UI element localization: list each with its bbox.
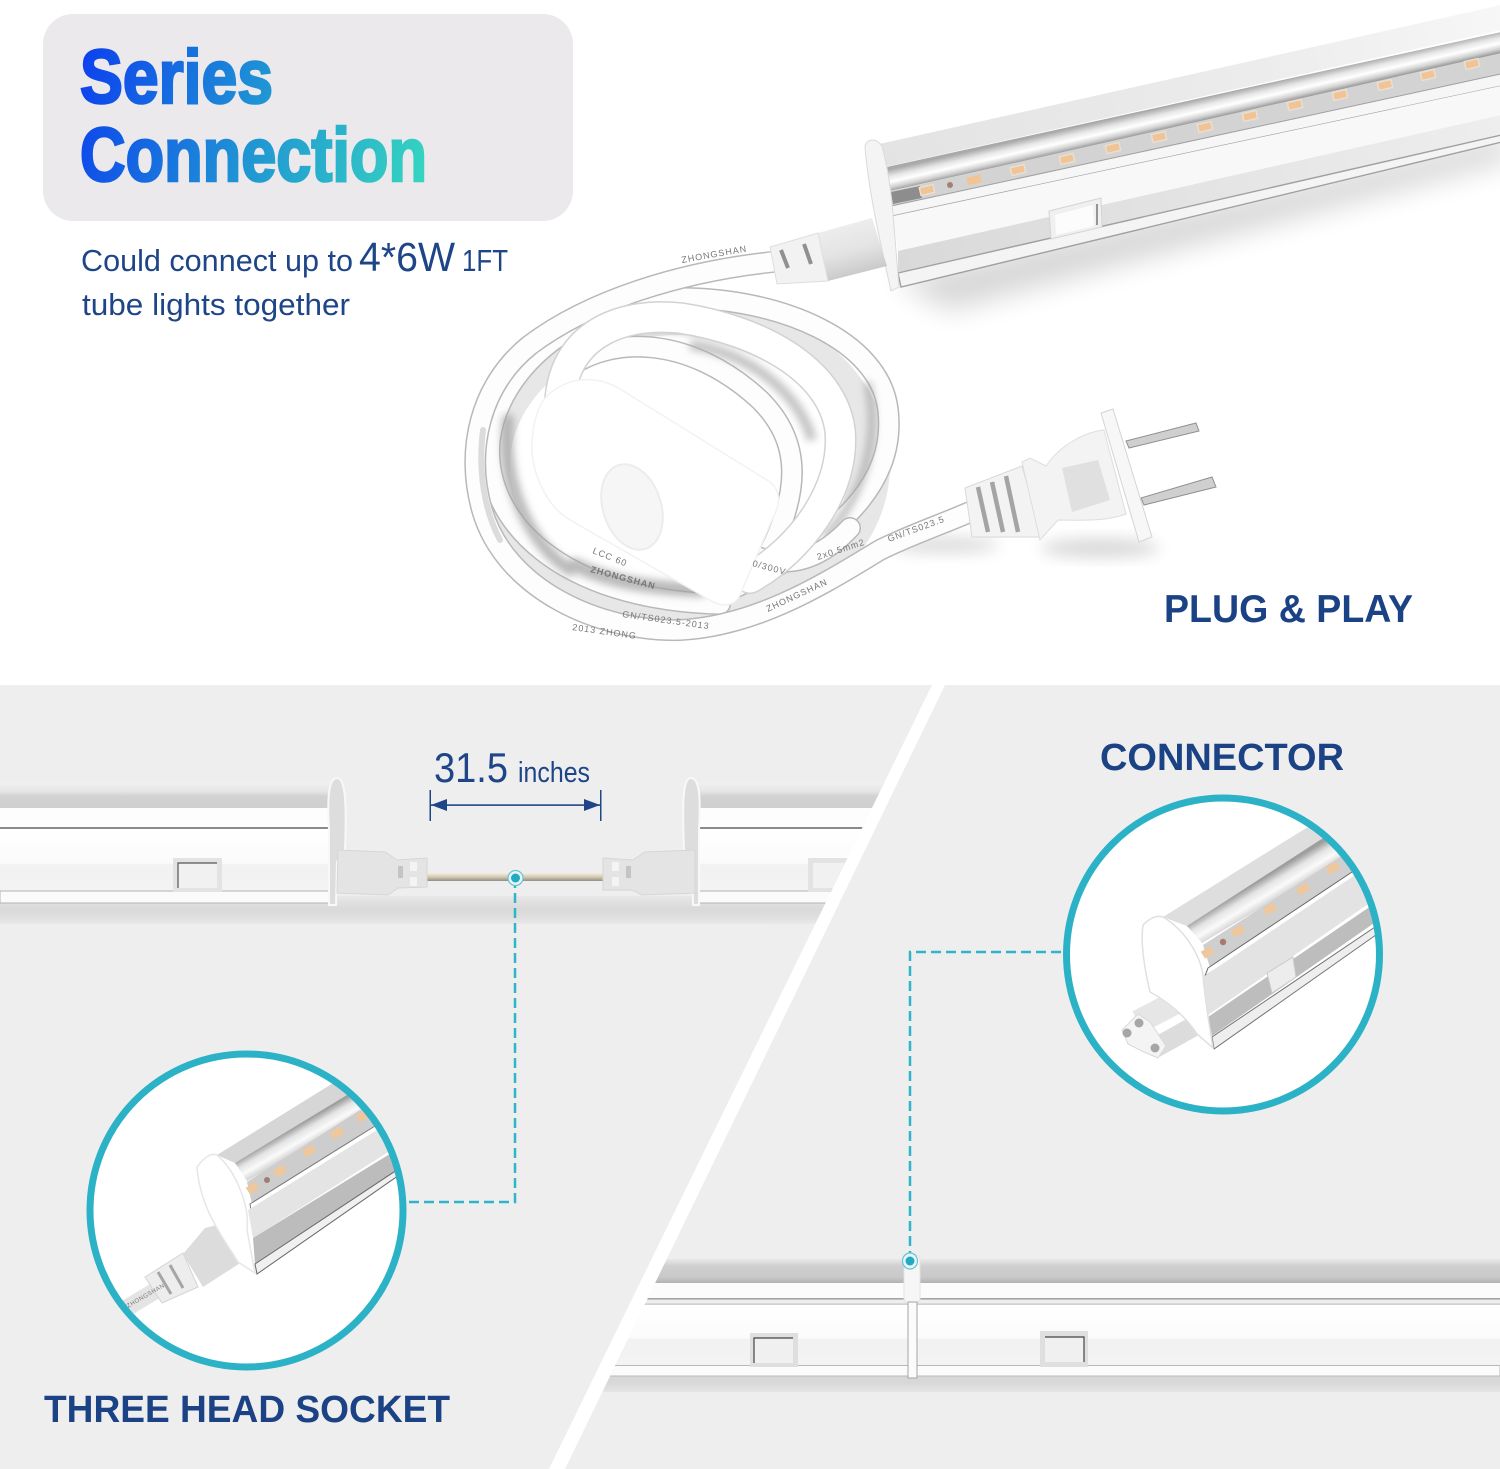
upper body bbox=[1203, 850, 1400, 1015]
ribbed relief bbox=[145, 1253, 198, 1303]
inline switch body bbox=[532, 380, 778, 605]
right plug connector bbox=[603, 850, 695, 895]
left plug connector bbox=[337, 850, 427, 895]
cord loop: front bbox=[560, 317, 841, 578]
text block: connection capacity: 1FT bbox=[462, 243, 508, 278]
left tube bottom strip bbox=[0, 891, 332, 903]
cord print: ZHONGSHAN bbox=[126, 1283, 166, 1310]
right tube bbox=[683, 778, 905, 905]
tube body bbox=[600, 1305, 1500, 1365]
strain relief bbox=[770, 233, 828, 284]
cord gap shadows bbox=[507, 327, 872, 590]
left tube body bbox=[0, 829, 328, 864]
label: THREE HEAD SOCKET: THREE HEAD SOCKET bbox=[44, 1389, 450, 1431]
inset circle fill bbox=[1067, 798, 1379, 1110]
resistor dot and first chip bbox=[947, 175, 982, 188]
panel: series connection title card bbox=[43, 14, 573, 221]
inset tube contents bbox=[1122, 827, 1375, 1058]
bottom strip bbox=[1212, 910, 1400, 1049]
cord loop: outer leading to tube and plug bbox=[475, 262, 970, 630]
track end reflection bbox=[891, 186, 922, 204]
inset tube contents bbox=[123, 1084, 396, 1314]
dimension: 31.5 inches: inches bbox=[518, 757, 590, 789]
dimension: 31.5 inches: 31.5 bbox=[434, 744, 508, 791]
right tube body bbox=[700, 829, 862, 864]
switch right bbox=[1040, 1331, 1088, 1367]
tube top band bbox=[600, 1259, 1500, 1283]
three head plug: upper barrel bbox=[1138, 1000, 1180, 1022]
white rail bbox=[891, 72, 1500, 216]
rod bbox=[1187, 838, 1340, 943]
cord loop: inner bbox=[565, 347, 792, 570]
tube cover bbox=[1164, 827, 1322, 926]
cord strand beside switch bbox=[725, 528, 850, 562]
plug prongs bbox=[1126, 423, 1216, 505]
inset: three head socket detail bbox=[90, 1040, 415, 1367]
LED track bbox=[1203, 826, 1400, 968]
tube top cover bbox=[875, 3, 1500, 167]
LEDs bbox=[246, 1109, 370, 1195]
cable between tubes bbox=[427, 873, 603, 881]
plug ridged grip bbox=[1062, 460, 1110, 512]
left tube dark line bbox=[0, 827, 332, 829]
label: CONNECTOR: CONNECTOR bbox=[1100, 737, 1344, 779]
plug holes bbox=[1122, 1018, 1160, 1052]
rail lines bbox=[600, 1298, 1500, 1305]
cord printing: 2x0.5mm2 bbox=[816, 537, 866, 562]
left tube switch bbox=[173, 858, 222, 892]
bottom strip bbox=[898, 133, 1500, 287]
cord printing: 0/300V bbox=[751, 558, 787, 577]
plug flange bbox=[1101, 409, 1152, 542]
strain relief grooves bbox=[781, 244, 811, 268]
text block: connection capacity: tube lights together bbox=[82, 287, 350, 322]
illustration: LED tube light, top right bbox=[865, 3, 1500, 310]
shade under front loop bbox=[690, 345, 812, 440]
rocker switch bbox=[1267, 957, 1296, 993]
white rail bbox=[1205, 848, 1400, 976]
title: Series Connection bbox=[80, 35, 427, 198]
illustration: two tubes butted together bbox=[590, 1254, 1500, 1386]
gray band bbox=[253, 1154, 394, 1264]
end cap bbox=[197, 1154, 255, 1273]
end cap bbox=[1142, 916, 1213, 1048]
gray band bbox=[1208, 888, 1400, 1036]
callout line: cable to socket detail bbox=[407, 870, 523, 1202]
plug strain relief ribs bbox=[965, 466, 1042, 537]
cord printing: GN/TS023.5-2013 bbox=[622, 609, 710, 631]
cord bbox=[123, 1284, 158, 1314]
text block: connection capacity bbox=[81, 234, 508, 322]
right tube white rail bbox=[700, 808, 872, 827]
rocker switch bbox=[1049, 198, 1102, 239]
right tube switch bbox=[808, 858, 848, 892]
gray body band bbox=[898, 113, 1500, 273]
shadow under tubes bbox=[0, 903, 840, 917]
dimension arrow bbox=[430, 790, 602, 821]
text block: connection capacity: Could connect up to bbox=[81, 243, 353, 278]
tube end cap bbox=[865, 140, 899, 291]
left tube end cap bbox=[328, 778, 346, 905]
tube shadow bbox=[590, 1374, 1500, 1386]
title card background bbox=[43, 14, 573, 221]
inset ring bbox=[1066, 798, 1380, 1111]
illustration: two tubes joined by cable bbox=[0, 778, 905, 917]
connector sleeve bbox=[818, 218, 887, 281]
text block: connection capacity: 4*6W bbox=[359, 234, 455, 280]
marker dot bbox=[902, 1253, 918, 1269]
cord printing: LCC 60 bbox=[591, 546, 629, 569]
coil backing shade bbox=[490, 315, 870, 615]
three head plug: end face bbox=[1122, 1014, 1166, 1058]
LEDs bbox=[1201, 861, 1340, 959]
left tube bbox=[0, 778, 346, 905]
plug and cord floor shadows bbox=[890, 538, 1160, 557]
marker dot bbox=[508, 870, 523, 886]
right tube dark line bbox=[700, 827, 862, 829]
three head plug: lower barrel bbox=[1155, 1024, 1198, 1048]
title: Series Connection: Series bbox=[80, 35, 273, 120]
left tube cover bbox=[0, 791, 328, 808]
tube shadow bbox=[895, 135, 1500, 310]
panel: gray background, right bbox=[565, 685, 1500, 1469]
upper body bbox=[893, 84, 1500, 251]
white rail bbox=[250, 1126, 374, 1209]
label: PLUG & PLAY: PLUG & PLAY bbox=[1164, 588, 1413, 631]
cord printing: 2013 ZHONG bbox=[572, 622, 638, 641]
cord printing: ZHONGSHAN bbox=[681, 244, 748, 265]
cord printing: GN/TS023.5 bbox=[886, 514, 946, 544]
LED track bbox=[247, 1110, 374, 1202]
right tube end cap bbox=[683, 778, 700, 905]
right tube cover bbox=[700, 790, 880, 808]
plug body bbox=[1022, 430, 1126, 540]
tube white rail bbox=[600, 1283, 1500, 1299]
title: Series Connection: Connection bbox=[80, 113, 427, 198]
inset circle fill bbox=[90, 1054, 402, 1366]
inline switch rocker bbox=[591, 456, 673, 558]
connector sleeve bbox=[184, 1226, 239, 1287]
inset: connector detail bbox=[1066, 775, 1400, 1111]
silver rod bbox=[887, 30, 1500, 191]
left tube white rail bbox=[0, 808, 335, 828]
cord printing bbox=[572, 244, 946, 641]
bottom strip bbox=[254, 1171, 396, 1275]
illustration: tube connector on cord bbox=[770, 218, 887, 284]
illustration: power cord with inline switch and plug bbox=[475, 244, 1216, 641]
inset ring bbox=[90, 1054, 403, 1367]
cord loop: middle bbox=[489, 298, 889, 604]
LED strip track bbox=[891, 51, 1500, 206]
LED chips bbox=[919, 59, 1480, 195]
switch left bbox=[750, 1333, 798, 1367]
cord printing: ZHONGSHAN bbox=[589, 564, 657, 591]
panel: gray background, left bbox=[0, 685, 932, 1469]
rod bbox=[235, 1095, 361, 1181]
right tube bottom strip bbox=[700, 890, 832, 904]
dimension: 31.5 inches bbox=[430, 744, 602, 821]
bottom strip bbox=[600, 1366, 1500, 1376]
cord printing: ZHONGSHAN bbox=[765, 577, 829, 614]
callout line: connector to detail bbox=[902, 952, 1065, 1269]
tube cover bbox=[218, 1084, 347, 1163]
upper body bbox=[248, 1130, 388, 1238]
connector joint bbox=[904, 1254, 920, 1378]
